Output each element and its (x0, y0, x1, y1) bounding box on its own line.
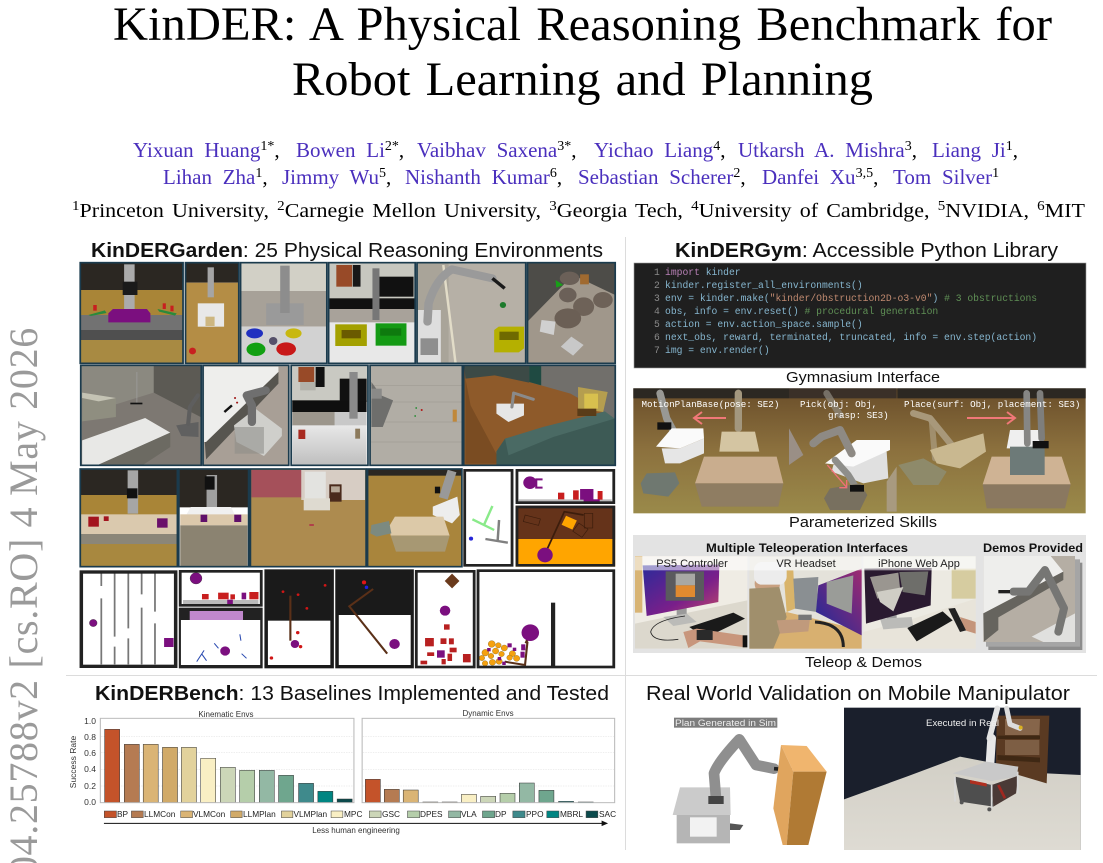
title: KinDER: A Physical Reasoning Benchmark for (113, 0, 1052, 51)
sim label text: Plan Generated in Sim (675, 718, 776, 728)
axis labels: 0.0 (84, 797, 96, 807)
authors: , (399, 138, 404, 162)
affiliations: MIT (1045, 200, 1086, 222)
code block: Gymnasium interface: # procedural generation (805, 306, 938, 317)
caption: Teleop and Demos: Teleop & Demos (805, 655, 922, 671)
affiliations: 6 (1037, 199, 1045, 214)
code block: Gymnasium interface: 6 (654, 332, 660, 343)
heading: KinDERBench: KinDERBench : 13 Baselines Implemented and Tested (95, 683, 609, 705)
authors: Nishanth Kumar (405, 165, 550, 189)
photo: VR headset (749, 556, 862, 649)
panel: parameterized skills (633, 388, 1086, 513)
authors: , (386, 165, 391, 189)
legend labels: VLMPlan (294, 809, 328, 819)
legend labels: MPC (344, 809, 362, 819)
tile: yellow and green boxes (329, 263, 415, 363)
affiliations: 1 (72, 199, 80, 214)
authors: 1 (992, 166, 999, 181)
legend swatches (104, 811, 598, 818)
axis labels: Dynamic Envs (462, 709, 514, 718)
affiliations: University of Cambridge, (699, 200, 938, 222)
authors: Tom Silver (893, 165, 992, 189)
axis labels: 1.0 (84, 716, 96, 726)
code block: Gymnasium interface: 1 (654, 267, 660, 278)
authors: Danfei Xu (762, 165, 856, 189)
affiliations: 2 (277, 199, 285, 214)
authors: 3 (905, 139, 912, 154)
authors: 3* (557, 139, 571, 154)
legend labels: GSC (382, 809, 400, 819)
authors: , (571, 138, 576, 162)
arXiv side stamp: 04.25788v2 [cs.RO] 4 May 2026 (1, 327, 46, 863)
axis caption: Less human engineering (312, 826, 400, 835)
tile: ball scene (185, 263, 239, 363)
dynamic bars (365, 779, 593, 803)
code block: Gymnasium interface: 4 (654, 306, 660, 317)
authors: Utkarsh A. Mishra (738, 138, 905, 162)
heading: KinDERGarden: KinDERGarden : 25 Physical Reasoning Environments (91, 240, 603, 262)
authors (133, 138, 1018, 189)
tile: 2D gripper with blocks (516, 469, 615, 504)
authors: 4 (713, 139, 720, 154)
tile: bowls scene (241, 263, 327, 363)
panel: real robot photo (844, 706, 1081, 850)
title (113, 0, 1052, 106)
legend labels: VLMCon (193, 809, 226, 819)
authors: 2 (733, 166, 740, 181)
axis labels: 0.2 (84, 781, 96, 791)
legend labels: LLMCon (144, 809, 176, 819)
authors: , (557, 165, 562, 189)
caption: Parameterized Skills: Parameterized Skills (789, 515, 937, 531)
code block: Gymnasium interface: 3 (654, 293, 660, 304)
authors: , (720, 138, 725, 162)
bar chart: success rate (68, 709, 616, 835)
code block: Gymnasium interface: import (665, 267, 700, 278)
panel: 3D environment tiles row 1 (79, 262, 616, 364)
affiliations: Georgia Tech, (557, 200, 691, 222)
authors: 5 (379, 166, 386, 181)
skill image 2 (789, 388, 897, 512)
code block: Gymnasium interface: "kinder/Obstruction2D-o3-v0") # 3 obstructions (770, 293, 1037, 304)
photo: iPhone web app (863, 556, 976, 649)
authors: Jimmy Wu (282, 165, 380, 189)
authors: Liang Ji (932, 138, 1006, 162)
authors: 1 (255, 166, 262, 181)
authors: 3,5 (856, 166, 873, 181)
photo labels: PS5 Controller (656, 558, 728, 570)
code block: Gymnasium interface: 2 (654, 280, 660, 291)
skill image 3 (897, 388, 1086, 508)
axis labels: Kinematic Envs (198, 710, 254, 719)
authors: , (740, 165, 746, 189)
skill labels: grasp: SE3) (828, 410, 889, 421)
tile: counter and arm (203, 365, 289, 465)
authors: , (274, 138, 280, 162)
legend labels: MBRL (560, 809, 583, 819)
tile: living room (464, 365, 615, 465)
tile: 2D ball and blocks (179, 570, 263, 607)
photo: PS5 controller (635, 556, 747, 649)
code block: Gymnasium interface: action = env.action_space.sample() (665, 319, 863, 330)
affiliations: Carnegie Mellon University, (285, 200, 549, 222)
code block: Gymnasium interface: 5 (654, 319, 660, 330)
legend labels: SAC (599, 809, 616, 819)
legend labels: DP (495, 809, 507, 819)
code block: Gymnasium interface: env = kinder.make( (665, 293, 770, 304)
arrow: less human engineering (104, 821, 607, 825)
tile: 2D rod with red dots (264, 569, 334, 668)
tile: 2D balls in tray (477, 569, 615, 668)
axis labels: 0.4 (84, 764, 96, 774)
affiliations: NVIDIA, (945, 200, 1037, 222)
authors: 1 (1006, 139, 1013, 154)
photo labels (656, 558, 960, 570)
tile: tray scene (80, 263, 183, 363)
legend labels (117, 809, 616, 819)
authors: , (262, 165, 268, 189)
authors: 6 (550, 166, 557, 181)
panel: teleop and demos (633, 535, 1086, 653)
authors: , (1013, 138, 1018, 162)
legend labels: DPES (420, 809, 443, 819)
photo overlay strip (635, 556, 976, 570)
tile: block and rubble (368, 469, 462, 567)
skill labels: MotionPlanBase(pose: SE2) (642, 399, 779, 410)
panel: environment tiles rows 3-4 (79, 468, 616, 668)
tile: chairs scene (527, 263, 615, 363)
tile: 2D purple strip with sticks (179, 608, 263, 668)
skill image 1 (633, 388, 789, 507)
skill labels: Pick(obj: Obj, (800, 399, 877, 410)
authors: 1* (260, 139, 274, 154)
tile: 2D T-shapes (463, 469, 513, 567)
authors: , (873, 165, 878, 189)
affiliations: Princeton University, (80, 200, 277, 222)
skill labels: Place(surf: Obj, placement: SE3) (904, 399, 1080, 410)
tile: arm and green ball (417, 263, 526, 363)
code block: Gymnasium interface: next_obs, reward, terminated, truncated, info = env.step(action) (665, 332, 1037, 343)
tile: table and shelf, sweeping (81, 365, 201, 465)
code block: Gymnasium interface: img = env.render() (665, 345, 770, 356)
panel: simulated plan (672, 718, 827, 845)
panel: 3D environment tiles row 2 (80, 364, 616, 466)
affiliations: 3 (549, 199, 557, 214)
heading: KinDERGym: KinDERGym : Accessible Python Library (675, 240, 1058, 262)
demos stack (983, 556, 1082, 650)
tile: 2D brown and orange (516, 506, 615, 567)
title: Robot Learning and Planning (292, 54, 873, 106)
code block: Gymnasium interface: 7 (654, 345, 660, 356)
authors: Vaibhav Saxena (417, 138, 558, 162)
authors: Yixuan Huang (133, 138, 261, 162)
arrow: place right (967, 412, 1015, 424)
tile: red and purple blocks (80, 469, 177, 567)
heading: Real World Validation: Real World Validation on Mobile Manipulator (646, 683, 1070, 705)
authors: , (912, 138, 917, 162)
tile: room with door (250, 469, 366, 567)
authors: Sebastian Scherer (578, 165, 733, 189)
legend labels: PPO (526, 809, 544, 819)
label: plan generated in sim (674, 718, 777, 728)
skill labels (642, 399, 1080, 421)
legend labels: BP (117, 809, 129, 819)
axis labels: 0.8 (84, 732, 96, 742)
tile: cans on table (291, 365, 368, 465)
axis labels: Success Rate (68, 736, 78, 788)
code block: Gymnasium interface: obs, info = env.reset() (665, 306, 805, 317)
code block: Gymnasium interface (634, 263, 1086, 368)
authors: Lihan Zha (163, 165, 256, 189)
authors: Yichao Liang (594, 138, 714, 162)
tile: floor with robot frame (370, 365, 462, 465)
tile: purple cubes (179, 469, 249, 567)
photo labels: VR Headset (776, 558, 836, 570)
affiliations: 5 (938, 199, 945, 214)
legend labels: LLMPlan (243, 809, 276, 819)
legend labels: VLA (461, 809, 477, 819)
kinematic bars (105, 729, 352, 803)
real label text: Executed in Real (926, 718, 999, 728)
photo labels: iPhone Web App (878, 558, 960, 570)
demos heading: Demos Provided (983, 541, 1083, 555)
tile: 2D maze (79, 570, 178, 668)
teleop heading: Multiple Teleoperation Interfaces (706, 541, 908, 555)
code block: Gymnasium interface: kinder (700, 267, 741, 278)
code block: Gymnasium interface: kinder.register_all_environments() (665, 280, 863, 291)
tile: 2D falling blocks (415, 570, 476, 668)
caption: Gymnasium Interface: Gymnasium Interface (786, 370, 940, 386)
tile: 2D bent rod (335, 569, 414, 668)
affiliations: 4 (691, 199, 699, 214)
arrow: move base left (694, 412, 726, 424)
authors: Bowen Li (296, 138, 385, 162)
authors: 2* (385, 139, 399, 154)
axis labels (68, 709, 514, 807)
sim robot and shelf (673, 739, 827, 845)
axis labels: 0.6 (84, 748, 96, 758)
